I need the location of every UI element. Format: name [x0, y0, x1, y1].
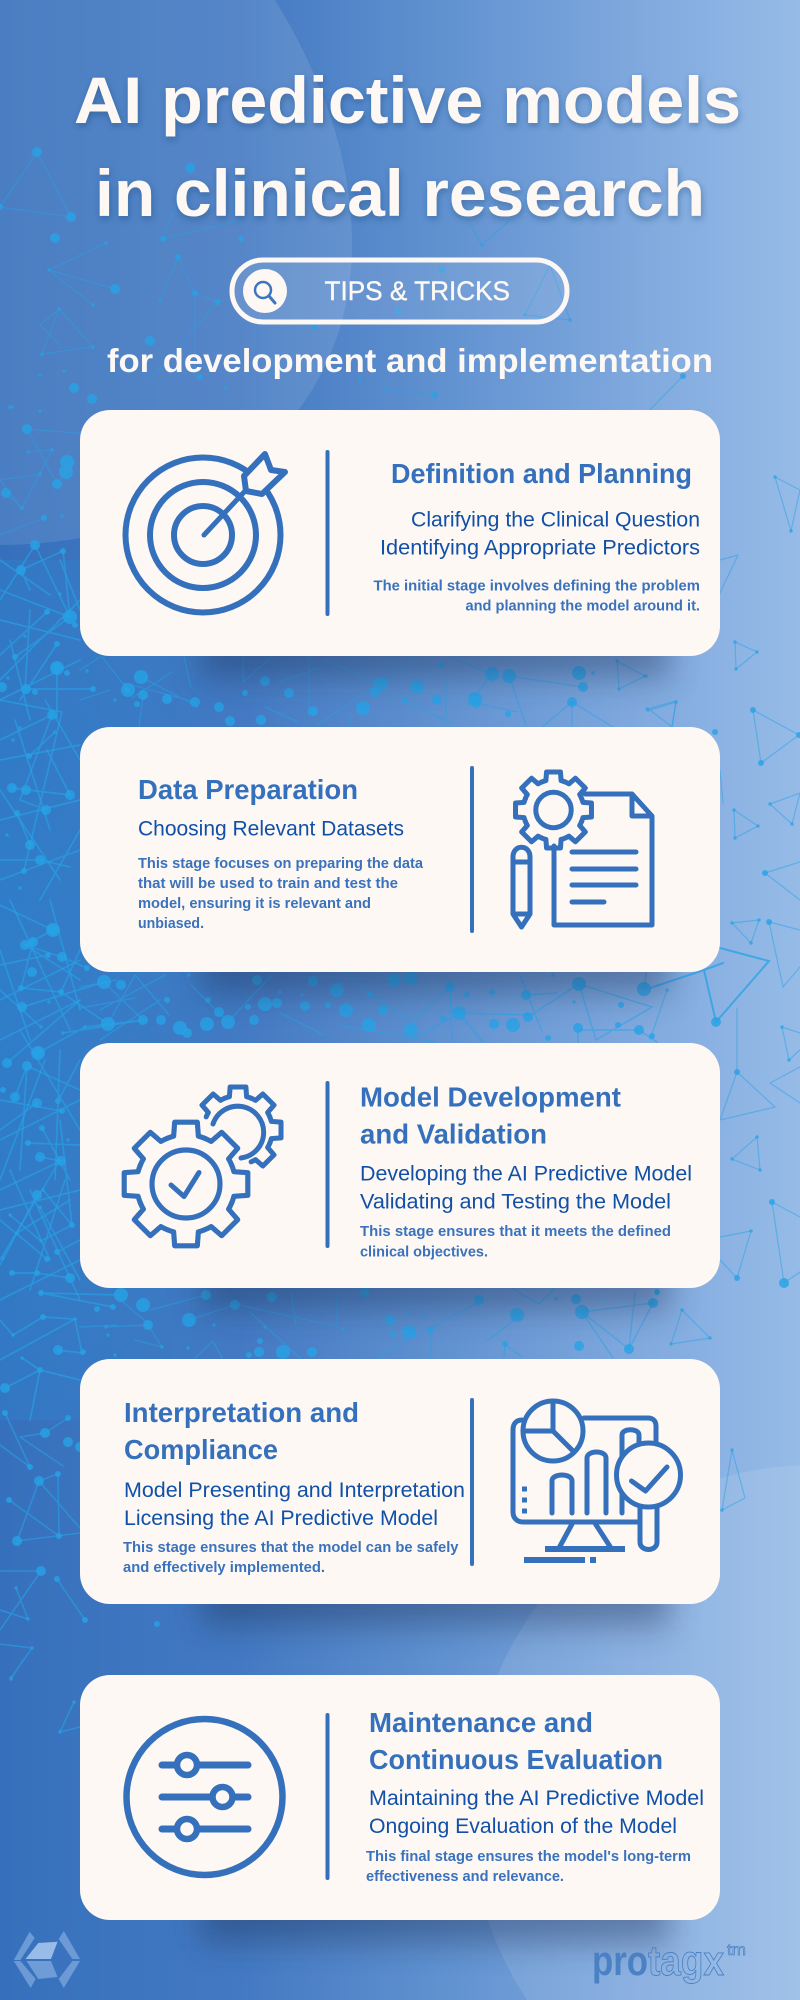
- network glow: [0, 560, 260, 1420]
- description: [360, 1224, 671, 1260]
- heading: [369, 1707, 663, 1775]
- description: The initial stage involves defining the problem: [374, 578, 700, 594]
- card shadows: [200, 620, 670, 1943]
- panel: data preparation: [80, 727, 720, 972]
- topics: Identifying Appropriate Predictors: [380, 536, 700, 560]
- description: This stage focuses on preparing the data: [138, 856, 424, 872]
- description: unbiased.: [138, 916, 204, 932]
- panel: maintenance and continuous evaluation: [80, 1675, 720, 1920]
- heading: Continuous Evaluation: [369, 1744, 663, 1775]
- logo: protagx wordmark: pro: [592, 1937, 648, 1984]
- heading: Definition and Planning: [391, 458, 692, 489]
- heading: Compliance: [124, 1434, 278, 1465]
- description: [123, 1540, 458, 1576]
- description: This stage ensures that it meets the defined: [360, 1224, 671, 1240]
- icon: magnifier: [243, 269, 287, 313]
- logo: protagx wordmark: tagx: [648, 1937, 725, 1984]
- logo: protagx wordmark: [592, 1937, 746, 1984]
- divider: [326, 452, 330, 614]
- description: and planning the model around it.: [466, 598, 700, 614]
- heading: Interpretation and: [124, 1397, 359, 1428]
- icon: target with arrow: [126, 454, 285, 612]
- heading: Model Development: [360, 1082, 621, 1112]
- topics: Maintaining the AI Predictive Model: [369, 1787, 704, 1810]
- divider: [470, 1400, 474, 1564]
- description: model, ensuring it is relevant and: [138, 896, 371, 912]
- topics: [360, 1162, 692, 1214]
- description: This final stage ensures the model's long-term: [366, 1849, 691, 1865]
- topics: Ongoing Evaluation of the Model: [369, 1815, 677, 1838]
- icon: document with gear and pencil: [513, 772, 652, 927]
- icon: gears with check: [124, 1087, 281, 1246]
- description: [374, 578, 700, 614]
- description: clinical objectives.: [360, 1244, 488, 1260]
- divider: [326, 1083, 330, 1246]
- description: and effectively implemented.: [123, 1560, 325, 1576]
- tips and tricks pill: [232, 260, 567, 322]
- topic: Choosing Relevant Datasets: [138, 818, 404, 840]
- logo: cube mark: [14, 1931, 80, 1988]
- background circle: top left: [0, 0, 352, 545]
- description: This stage ensures that the model can be safely: [123, 1540, 458, 1556]
- divider: [326, 1715, 330, 1878]
- panel: interpretation and compliance: [80, 1359, 720, 1604]
- subtitle: for development and implementation: [107, 342, 713, 379]
- heading: [124, 1397, 359, 1465]
- description: effectiveness and relevance.: [366, 1869, 564, 1885]
- description: that will be used to train and test the: [138, 876, 398, 892]
- topics: Validating and Testing the Model: [360, 1190, 671, 1214]
- topics: Developing the AI Predictive Model: [360, 1162, 692, 1186]
- topics: [124, 1479, 465, 1530]
- title: AI predictive models: [74, 63, 741, 137]
- icon: sliders in circle: [126, 1719, 282, 1875]
- network pattern background: [0, 152, 800, 1732]
- heading: Maintenance and: [369, 1707, 593, 1738]
- logo: protagx wordmark: tm: [727, 1942, 746, 1959]
- heading: [360, 1082, 621, 1150]
- heading: and Validation: [360, 1118, 547, 1150]
- topics: [380, 508, 700, 560]
- icon: monitor with charts and magnifier: [513, 1401, 680, 1560]
- heading: Data Preparation: [138, 774, 358, 805]
- title: [74, 63, 741, 230]
- topics: Licensing the AI Predictive Model: [124, 1507, 438, 1530]
- topics: Clarifying the Clinical Question: [411, 508, 700, 532]
- background circle: bottom right: [470, 1465, 800, 2000]
- panel: model development and validation: [80, 1043, 720, 1288]
- description: [366, 1849, 691, 1885]
- divider: [470, 768, 474, 931]
- panel: definition and planning: [80, 410, 720, 656]
- topics: Model Presenting and Interpretation: [124, 1479, 465, 1502]
- title: in clinical research: [95, 156, 705, 230]
- topics: [369, 1787, 704, 1838]
- description: [138, 856, 424, 932]
- pill label: TIPS & TRICKS: [324, 276, 510, 306]
